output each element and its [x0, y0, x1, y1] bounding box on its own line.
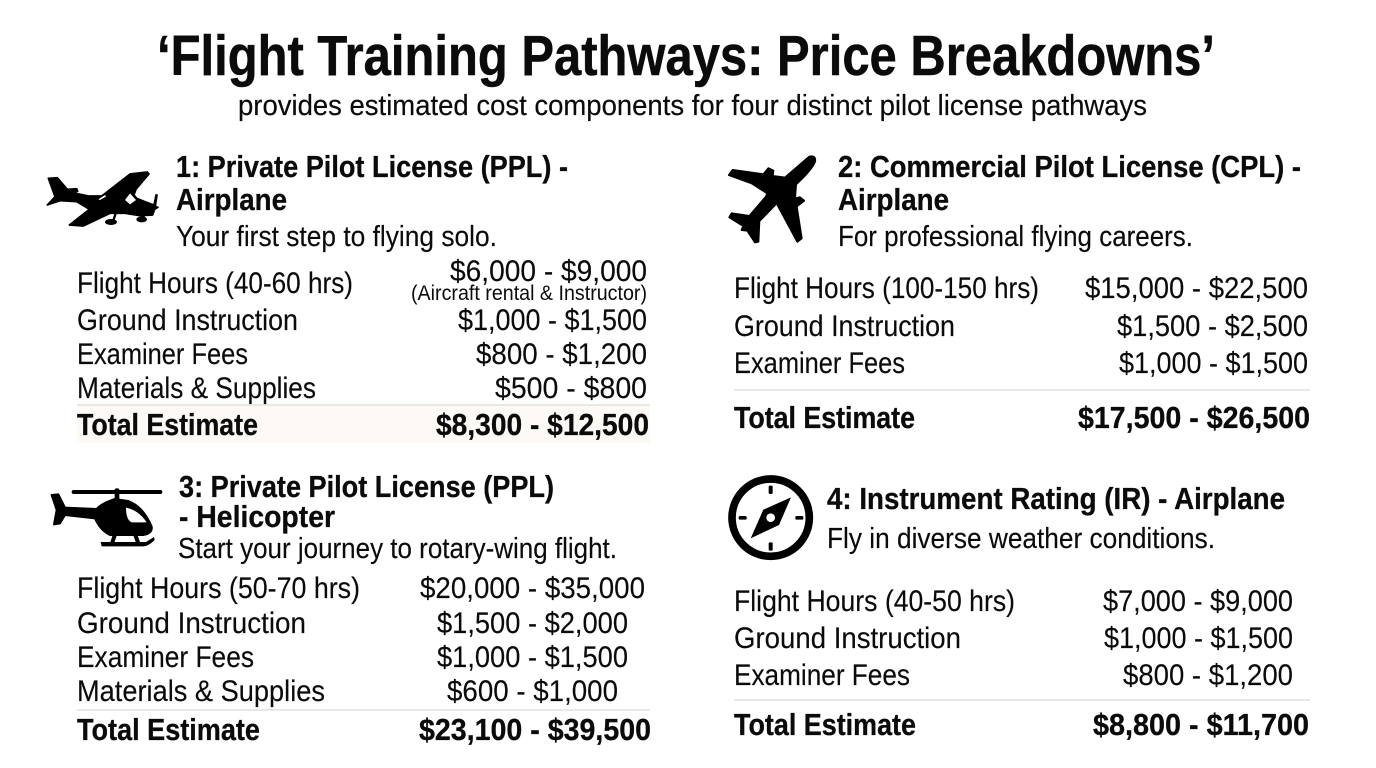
cost row: flight hours [77, 255, 647, 305]
cost row: flight hours: (Aircraft rental & Instructor) [411, 282, 647, 305]
cost row: ground instruction [77, 304, 647, 337]
total row: panel 4: Total Estimate [734, 707, 916, 742]
cost row: examiner fees: Examiner Fees [734, 659, 910, 692]
cost row: examiner fees: $1,000 - $1,500 [437, 641, 628, 674]
cost row: ground instruction: $1,000 - $1,500 [458, 304, 647, 337]
cost row: examiner fees: $800 - $1,200 [476, 338, 647, 371]
cost row: flight hours: Flight Hours (40-60 hrs) [77, 267, 353, 300]
panel: instrument rating airplane [732, 479, 1310, 742]
cost row: materials and supplies: $600 - $1,000 [447, 675, 618, 708]
cost row: ground instruction: Ground Instruction [77, 304, 298, 337]
cost row: ground instruction: $1,500 - $2,500 [1117, 310, 1308, 343]
icon: helicopter [52, 488, 162, 546]
title: ‘Flight Training Pathways: Price Breakdowns’ [157, 24, 1215, 88]
panel: commercial pilot license airplane [729, 149, 1310, 435]
cost row: ground instruction [77, 607, 628, 640]
heading: panel 2 [838, 149, 1301, 217]
cost row: flight hours: Flight Hours (40-50 hrs) [734, 585, 1015, 618]
total row: panel 1: Total Estimate [77, 407, 258, 442]
subtitle: provides estimated cost components for four distinct pilot license pathways [238, 90, 1147, 122]
heading: panel 1 [176, 149, 568, 217]
description: panel 3: Start your journey to rotary-wing flight. [178, 533, 617, 565]
heading: panel 1: 1: Private Pilot License (PPL) - [176, 149, 568, 184]
panel: private pilot license helicopter [52, 469, 651, 747]
heading: panel 3 [179, 469, 554, 534]
total row: panel 1: $8,300 - $12,500 [436, 407, 649, 442]
cost row: flight hours: Flight Hours (100-150 hrs) [734, 272, 1039, 305]
cost row: flight hours [734, 272, 1308, 305]
cost row: examiner fees [734, 659, 1293, 692]
heading: panel 3: 3: Private Pilot License (PPL) [179, 469, 554, 504]
cost row: ground instruction: $1,000 - $1,500 [1104, 622, 1293, 655]
cost row: materials and supplies: $500 - $800 [495, 372, 647, 405]
icon: light airplane [47, 172, 158, 226]
description: panel 1: Your first step to flying solo. [176, 221, 497, 253]
icon: compass [732, 479, 809, 556]
cost row: ground instruction [734, 310, 1308, 343]
cost row: examiner fees: Examiner Fees [77, 641, 254, 674]
icon: jet airplane [729, 156, 815, 242]
total row: panel 4 [734, 707, 1309, 742]
cost row: ground instruction: $1,500 - $2,000 [437, 607, 628, 640]
cost row: examiner fees: Examiner Fees [77, 338, 248, 371]
description: panel 2: For professional flying careers. [838, 221, 1193, 253]
total row: panel 4: $8,800 - $11,700 [1093, 707, 1309, 742]
heading: panel 2: 2: Commercial Pilot License (CPL) - [838, 149, 1301, 184]
total row: panel 3: $23,100 - $39,500 [419, 712, 651, 747]
cost row: flight hours: $15,000 - $22,500 [1085, 272, 1308, 305]
total row: panel 3: Total Estimate [77, 712, 260, 747]
heading: panel 2: Airplane [838, 182, 949, 217]
cost row: flight hours: $6,000 - $9,000 [450, 255, 647, 288]
cost row: examiner fees: $800 - $1,200 [1123, 659, 1293, 692]
cost row: examiner fees: $1,000 - $1,500 [1119, 347, 1308, 380]
cost row: materials and supplies: Materials & Supplies [77, 675, 325, 708]
heading: panel 1: Airplane [176, 182, 287, 217]
cost row: examiner fees [77, 641, 628, 674]
cost row: ground instruction: Ground Instruction [734, 622, 961, 655]
total row: panel 3 [77, 712, 651, 747]
panel: private pilot license airplane [47, 149, 650, 443]
heading: panel 4: 4: Instrument Rating (IR) - Airplane [827, 481, 1285, 516]
cost row: examiner fees: Examiner Fees [734, 347, 905, 380]
total row: panel 2: Total Estimate [734, 400, 915, 435]
cost row: ground instruction: Ground Instruction [77, 607, 306, 640]
cost row: flight hours [77, 572, 645, 605]
total row: panel 2 [734, 400, 1310, 435]
description: panel 4: Fly in diverse weather conditions. [827, 523, 1215, 555]
total row: panel 1 [77, 407, 649, 442]
cost row: flight hours: $7,000 - $9,000 [1103, 585, 1293, 618]
cost row: examiner fees [77, 338, 647, 371]
cost row: ground instruction: Ground Instruction [734, 310, 955, 343]
cost row: flight hours: $20,000 - $35,000 [420, 572, 645, 605]
cost row: materials and supplies [77, 675, 618, 708]
cost row: materials and supplies [77, 372, 647, 405]
total row: panel 2: $17,500 - $26,500 [1078, 400, 1310, 435]
cost row: materials and supplies: Materials & Supplies [77, 372, 316, 405]
cost row: examiner fees [734, 347, 1308, 380]
heading: panel 3: - Helicopter [179, 499, 335, 534]
cost row: ground instruction [734, 622, 1293, 655]
cost row: flight hours: Flight Hours (50-70 hrs) [77, 572, 360, 605]
cost row: flight hours [734, 585, 1293, 618]
